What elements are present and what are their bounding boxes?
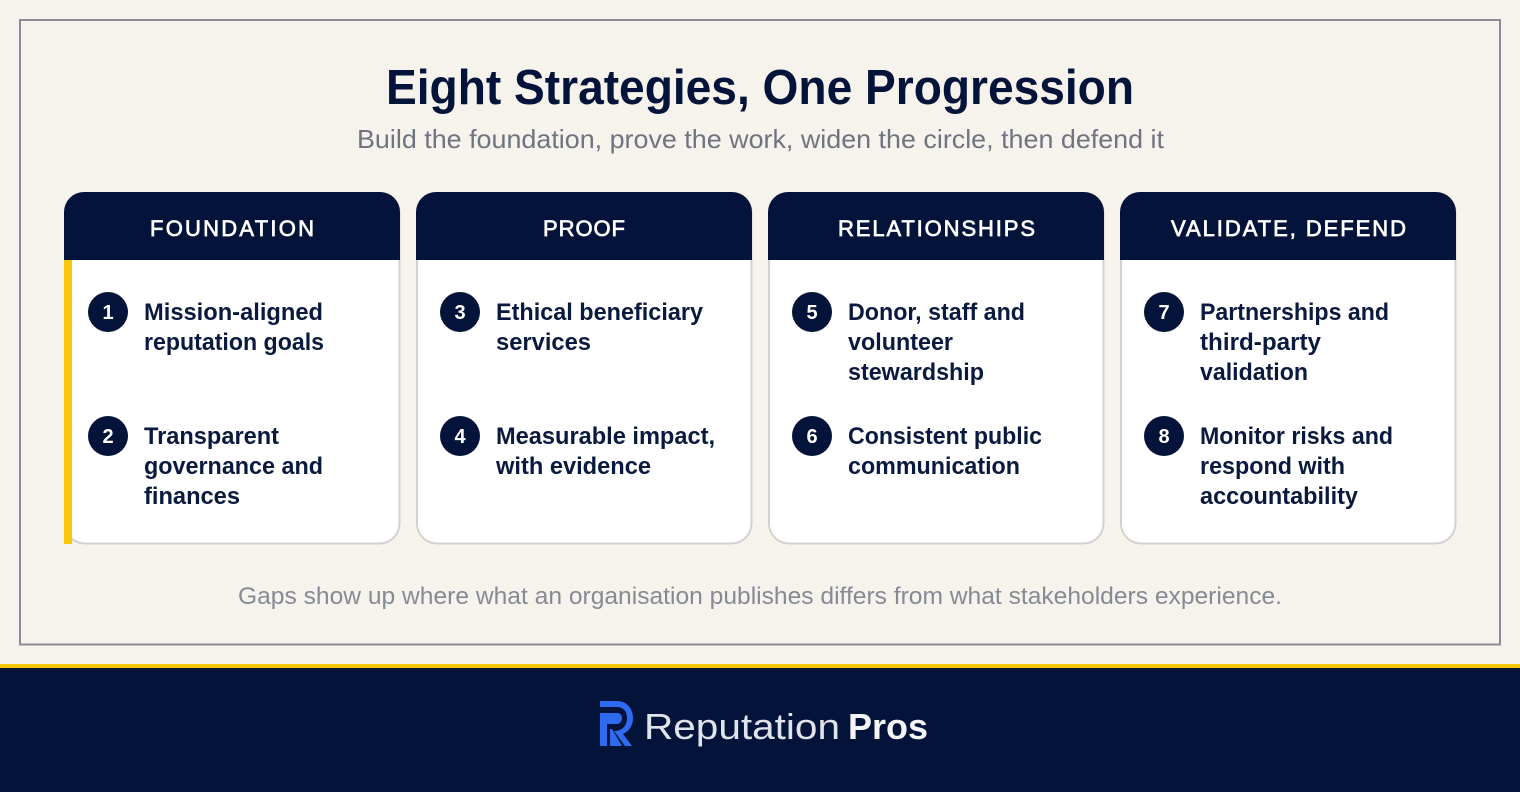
strategy 7: third-party [1200,329,1322,356]
icon: R mark [600,701,633,746]
logo [600,701,928,747]
strategy 2: finances [144,483,240,510]
footnote: Gaps show up where what an organisation publishes differs from what stakeholders experience. [238,583,1282,610]
strategy 2: governance and [144,453,323,480]
badge 3 [440,292,480,332]
strategy 7: validation [1200,359,1308,386]
panel: foundation [64,192,400,544]
badge 7 [1144,292,1184,332]
strategy 8: respond with [1200,453,1345,480]
outer frame [20,20,1500,644]
badge 2: 2 [102,426,114,448]
strategy 1: reputation goals [144,329,324,356]
header: relationships [768,192,1104,260]
badge 3: 3 [454,302,466,324]
wordmark: Reputation [644,706,840,747]
strategy 4: with evidence [495,453,651,480]
strategy 8: accountability [1200,483,1359,510]
strategy 5: stewardship [848,359,984,386]
header label: validate, defend: VALIDATE, DEFEND [1171,216,1406,241]
accent bar [64,260,72,544]
strategy 2: Transparent [144,423,279,450]
strategy 7: Partnerships and [1200,299,1389,326]
badge 5 [792,292,832,332]
strategy 4 [495,423,715,480]
badge 1 [88,292,128,332]
strategy 5: Donor, staff and [848,299,1025,326]
title: Eight Strategies, One Progression [386,61,1134,115]
panel: relationships [768,192,1104,544]
strategy 6: Consistent public [848,423,1042,450]
subtitle: Build the foundation, prove the work, widen the circle, then defend it [357,124,1165,154]
header: proof [416,192,752,260]
strategy 2 [144,423,323,510]
strategy 3: services [496,329,591,356]
strategy 8: Monitor risks and [1200,423,1393,450]
wordmark: Pros [848,706,928,747]
wordmark [644,706,928,747]
strategy 7 [1200,299,1389,386]
header: validate, defend [1120,192,1456,260]
strategy 5 [848,299,1025,386]
footer band [0,664,1520,792]
badge 7: 7 [1158,302,1170,324]
badge 1: 1 [102,302,114,324]
badge 8 [1144,416,1184,456]
header label: proof: PROOF [543,216,625,241]
header label: foundation: FOUNDATION [150,216,314,241]
badge 6: 6 [806,426,818,448]
strategy 1: Mission-aligned [144,299,323,326]
strategy 1 [144,299,324,356]
panel: validate, defend [1120,192,1456,544]
strategy 3: Ethical beneficiary [496,299,704,326]
strategy 3 [496,299,704,356]
panel: proof [416,192,752,544]
badge 6 [792,416,832,456]
badge 2 [88,416,128,456]
badge 4: 4 [454,426,466,448]
header label: relationships: RELATIONSHIPS [838,216,1035,241]
header: foundation [64,192,400,260]
badge 4 [440,416,480,456]
strategy 5: volunteer [848,329,953,356]
badge 8: 8 [1158,426,1170,448]
strategy 6: communication [848,453,1020,480]
badge 5: 5 [806,302,818,324]
strategy 8 [1200,423,1393,510]
strategy 6 [848,423,1042,480]
strategy 4: Measurable impact, [496,423,715,450]
